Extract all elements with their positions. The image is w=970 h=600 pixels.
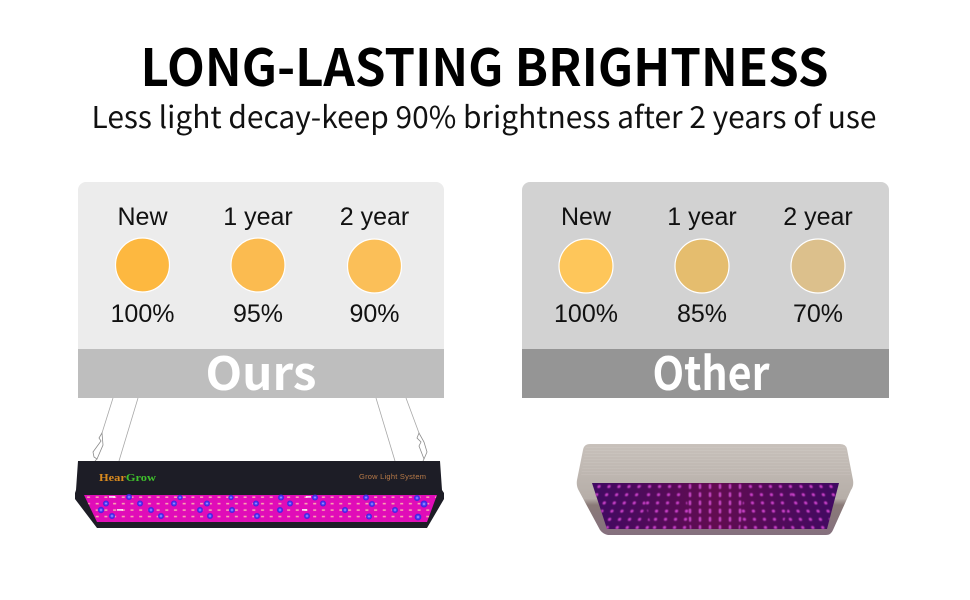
other label band: Other (652, 338, 770, 404)
led panel (84, 494, 437, 522)
other 2 year (783, 203, 853, 328)
panel: ours (78, 182, 444, 404)
other new: New (561, 203, 612, 231)
ours label band (78, 338, 444, 404)
housing (75, 461, 444, 528)
ours 2 year: 90% (349, 300, 400, 328)
other label band (522, 338, 889, 404)
ours 2 year: 2 year (340, 203, 409, 231)
other 1 year (667, 203, 737, 328)
hanging wires (93, 398, 427, 461)
other new (554, 203, 618, 328)
ours 1 year: 1 year (223, 203, 293, 231)
other 2 year: 70% (793, 300, 843, 328)
ours new: New (117, 203, 168, 231)
ours new (111, 203, 174, 328)
subtitle: Less light decay-keep 90% brightness after 2 years of use (92, 93, 876, 137)
system label: Grow Light System (359, 472, 426, 481)
icon: other grow light (577, 444, 853, 535)
led panel (592, 483, 839, 529)
icon: ours grow light (75, 398, 444, 528)
other 1 year: 85% (677, 300, 727, 328)
ours new: 100% (111, 300, 174, 328)
ours label band: Ours (206, 338, 316, 404)
ours 1 year: 95% (233, 300, 283, 328)
other new: 100% (554, 300, 618, 328)
other 1 year: 1 year (667, 203, 737, 231)
other 2 year: 2 year (783, 203, 853, 231)
title: LONG-LASTING BRIGHTNESS (140, 27, 828, 101)
ours 2 year (340, 203, 409, 328)
ours 1 year (223, 203, 293, 328)
brand: Hear Grow (99, 473, 156, 484)
aluminium housing (577, 444, 853, 535)
panel: other (522, 182, 889, 404)
